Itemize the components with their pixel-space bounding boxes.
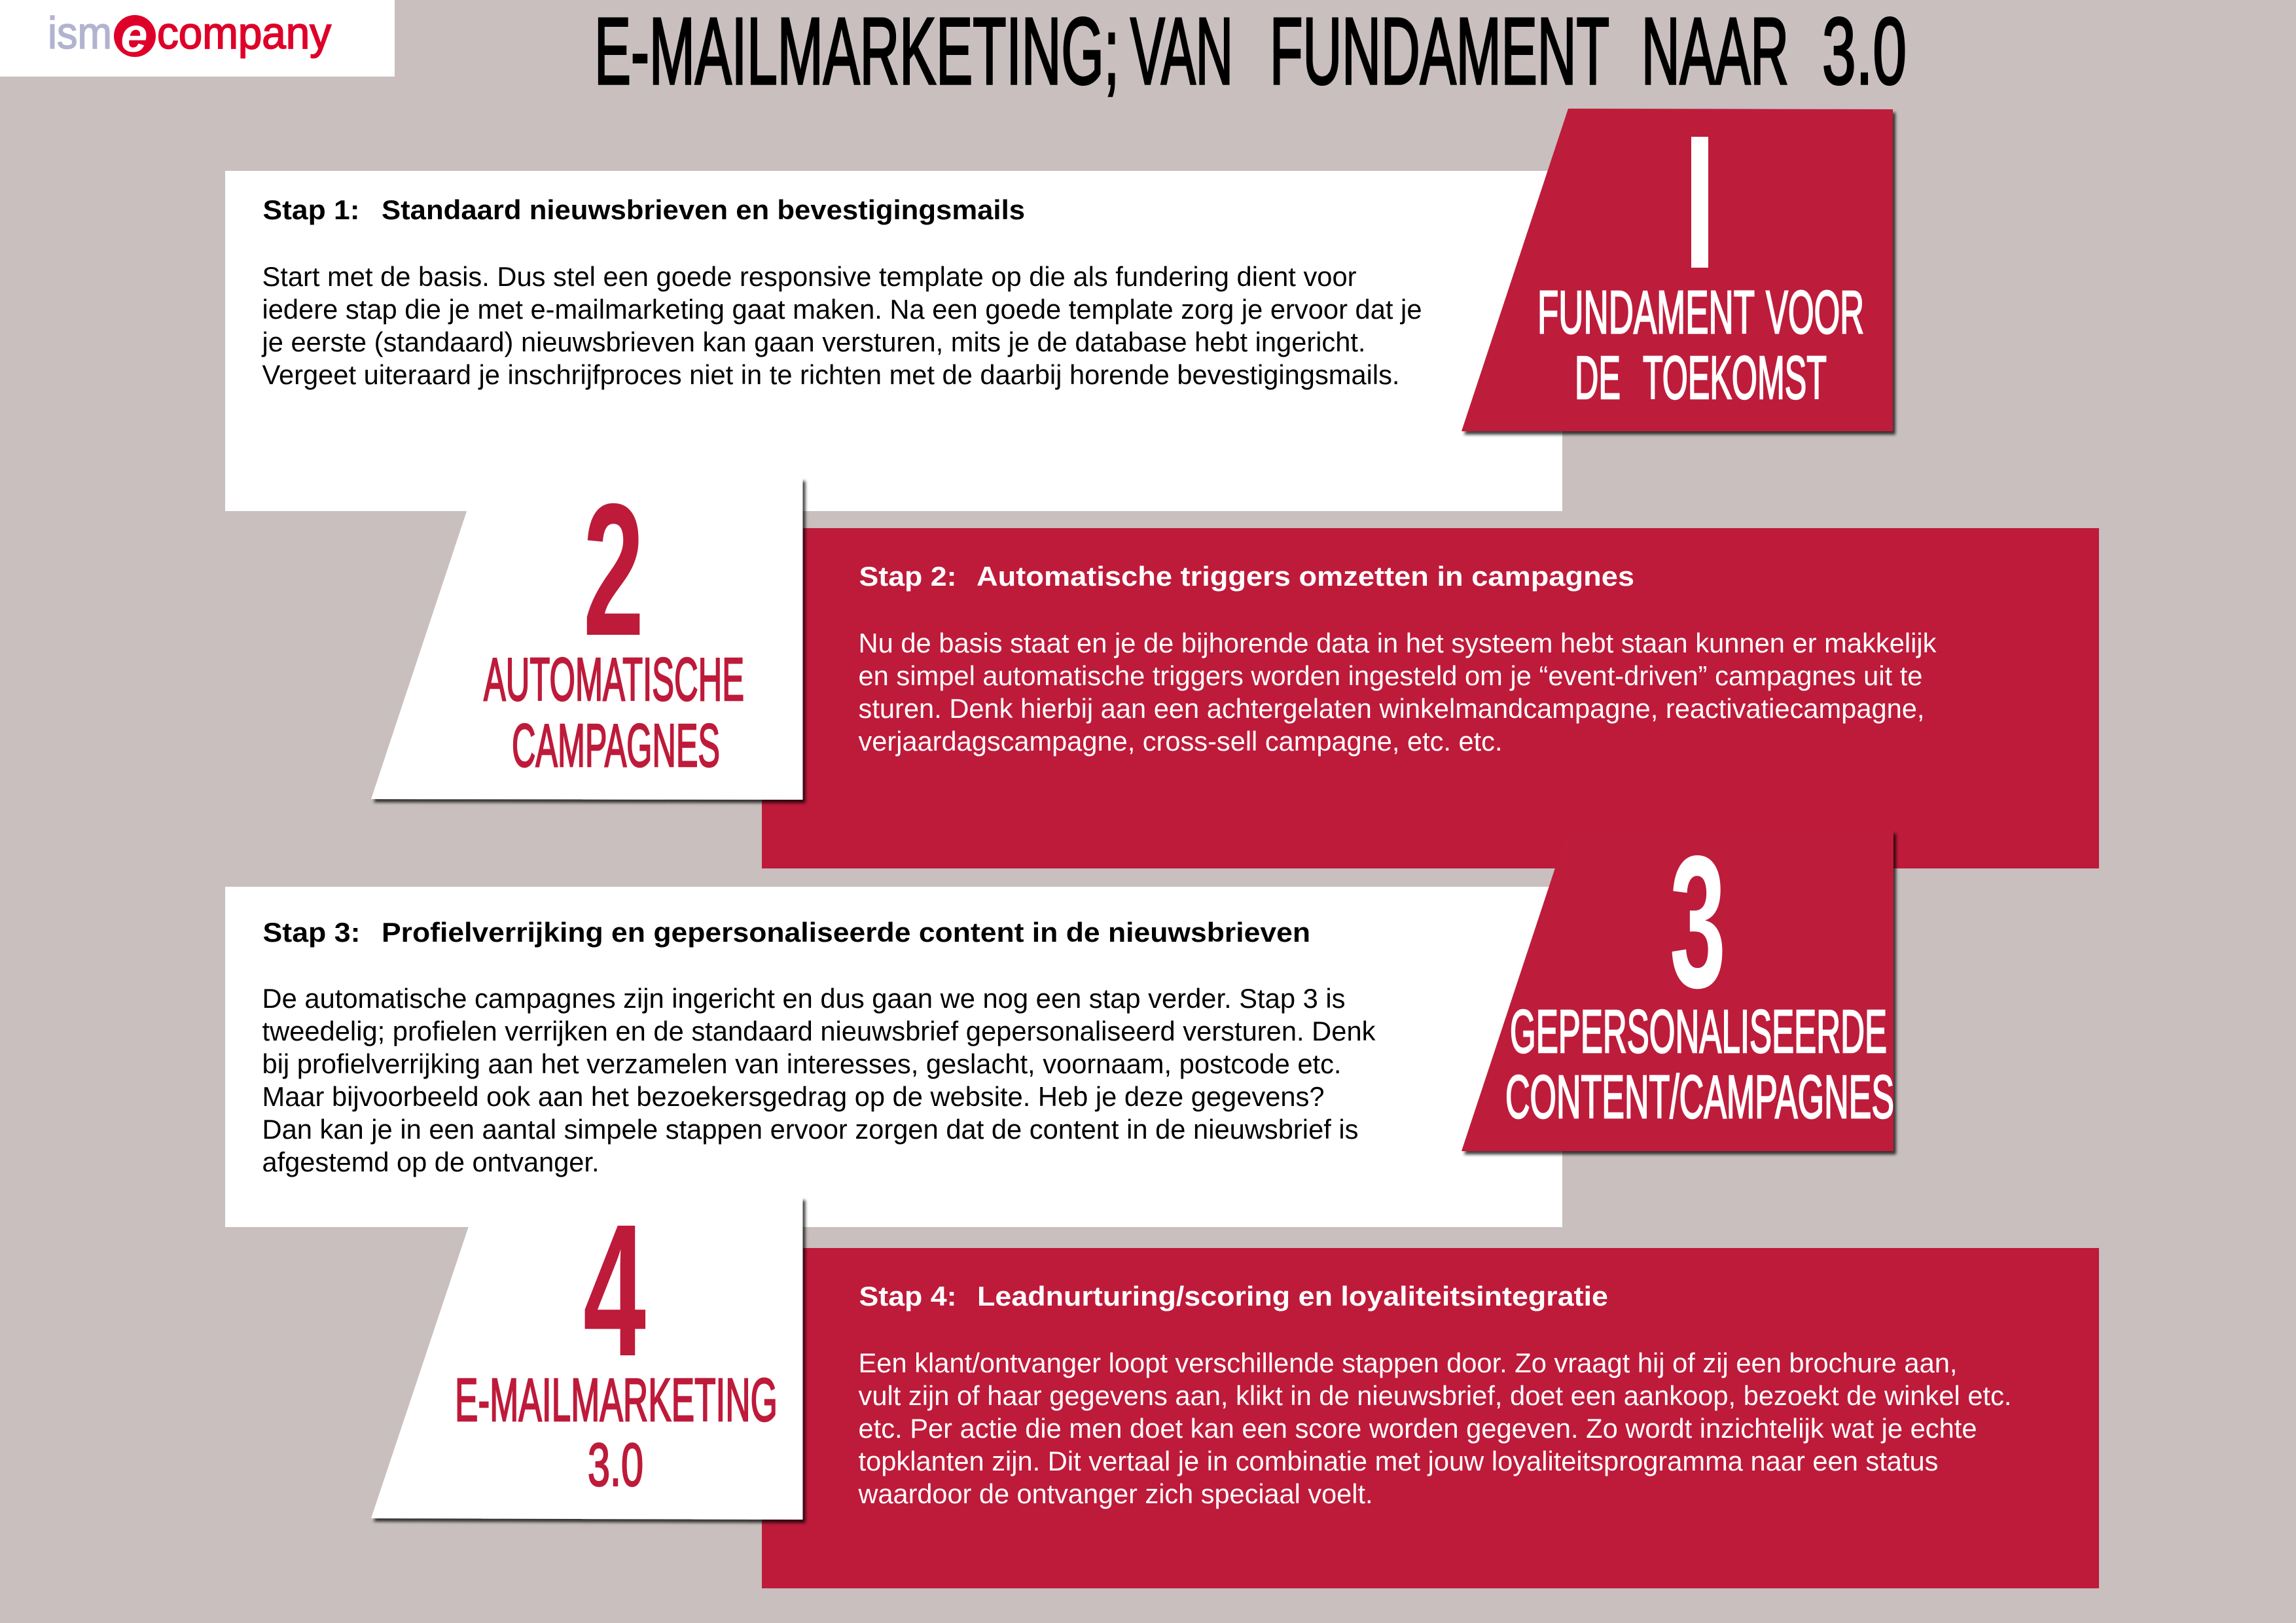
label: e-mailmarketing 3.0: E-MAILMARKETING <box>455 1366 778 1434</box>
label: gepersonaliseerde content/campagnes: GEPERSONALISEERDE <box>1510 997 1887 1065</box>
text block: stap 1 <box>261 261 1422 390</box>
heading: stap 3: Stap 3: <box>263 917 360 948</box>
title: VAN <box>1130 0 1233 104</box>
text block: stap 2: verjaardagscampagne, cross-sell campagne, etc. etc. <box>859 726 1503 757</box>
text block: stap 2: sturen. Denk hierbij aan een achtergelaten winkelmandcampagne, reactivatiecampagne, <box>859 693 1924 724</box>
tag: 1 fundament voor de toekomst <box>1462 77 1893 431</box>
logo: ism e company: e <box>120 8 148 62</box>
text block: stap 1: iedere stap die je met e-mailmarketing gaat maken. Na een goede template zorg je ervoor dat je <box>262 294 1422 325</box>
heading: stap 2: Automatische triggers omzetten in campagnes <box>977 561 1634 592</box>
text block: stap 3 <box>262 983 1376 1177</box>
heading: stap 2: Stap 2: <box>859 561 957 592</box>
text block: stap 4 <box>858 1347 2012 1509</box>
text block: stap 3: tweedelig; profielen verrijken en de standaard nieuwsbrief gepersonaliseerd versturen. Denk <box>262 1016 1376 1046</box>
tag: 2 automatische campagnes <box>371 465 802 800</box>
text block: stap 2 <box>859 628 1937 757</box>
text block: stap 3: afgestemd op de ontvanger. <box>262 1147 600 1177</box>
text block: stap 4: Een klant/ontvanger loopt verschillende stappen door. Zo vraagt hij of zij een brochure aan, <box>859 1347 1957 1378</box>
text block: stap 4: topklanten zijn. Dit vertaal je in combinatie met jouw loyaliteitsprogramma naar een status <box>859 1446 1939 1476</box>
heading: stap 1: Standaard nieuwsbrieven en bevestigingsmails <box>382 194 1025 225</box>
heading: stap 3: Profielverrijking en gepersonaliseerde content in de nieuwsbrieven <box>382 917 1310 948</box>
label: e-mailmarketing 3.0: 3.0 <box>588 1431 643 1499</box>
label: fundament voor de toekomst: DE <box>1575 344 1621 412</box>
panel: stap 3 <box>225 887 1562 1227</box>
tag: 3 gepersonaliseerde content/campagnes <box>1462 817 1894 1151</box>
tag: 4 e-mailmarketing 3.0 <box>371 1185 802 1520</box>
title: 3.0 <box>1822 0 1907 104</box>
label: fundament voor de toekomst <box>1537 278 1864 412</box>
label: automatische campagnes: AUTOMATISCHE <box>484 645 744 713</box>
text block: stap 4: etc. Per actie die men doet kan een score worden gegeven. Zo wordt inzichtelijk wat je echte <box>859 1413 1977 1444</box>
label: fundament voor de toekomst: VOOR <box>1766 278 1864 346</box>
label: e-mailmarketing 3.0 <box>455 1366 778 1499</box>
label: gepersonaliseerde content/campagnes: CONTENT/CAMPAGNES <box>1505 1063 1894 1131</box>
text block: stap 2: en simpel automatische triggers worden ingesteld om je “event-driven” campagnes uit te <box>859 660 1923 691</box>
logo: ism e company <box>0 0 395 77</box>
label: fundament voor de toekomst: TOEKOMST <box>1643 344 1827 412</box>
heading: stap 1: Stap 1: <box>263 194 360 225</box>
title <box>594 0 1907 104</box>
title: NAAR <box>1641 0 1789 104</box>
title: FUNDAMENT <box>1270 0 1609 104</box>
logo: ism e company: company <box>157 8 331 58</box>
label: fundament voor de toekomst: FUNDAMENT <box>1537 278 1755 346</box>
text block: stap 1: Vergeet uiteraard je inschrijfproces niet in te richten met de daarbij horende bevestigingsmails. <box>262 359 1399 390</box>
text block: stap 1: Start met de basis. Dus stel een goede responsive template op die als fundering dient voor <box>262 261 1357 292</box>
panel: stap 1 <box>225 171 1562 511</box>
text block: stap 3: Dan kan je in een aantal simpele stappen ervoor zorgen dat de content in de nieuwsbrief is <box>262 1114 1359 1145</box>
number 2: 2 <box>583 465 644 675</box>
text block: stap 2: Nu de basis staat en je de bijhorende data in het systeem hebt staan kunnen er makkelijk <box>859 628 1937 658</box>
label: automatische campagnes <box>484 645 744 779</box>
text block: stap 3: bij profielverrijking aan het verzamelen van interesses, geslacht, voornaam, postcode etc. <box>262 1048 1342 1079</box>
text block: stap 4: waardoor de ontvanger zich speciaal voelt. <box>858 1478 1373 1509</box>
text block: stap 4: vult zijn of haar gegevens aan, klikt in de nieuwsbrief, doet een aankoop, bezoekt de winkel etc. <box>859 1380 2012 1411</box>
number 1: 1 <box>1634 77 1758 326</box>
text block: stap 1: je eerste (standaard) nieuwsbrieven kan gaan versturen, mits je de database hebt ingericht. <box>261 327 1366 357</box>
number 3: 3 <box>1670 817 1726 1027</box>
title: E-MAILMARKETING; <box>594 0 1119 104</box>
heading: stap 4: Leadnurturing/scoring en loyaliteitsintegratie <box>977 1281 1608 1311</box>
text block: stap 3: De automatische campagnes zijn ingericht en dus gaan we nog een stap verder. Stap 3 is <box>262 983 1346 1014</box>
label: automatische campagnes: CAMPAGNES <box>512 711 720 779</box>
text block: stap 3: Maar bijvoorbeeld ook aan het bezoekersgedrag op de website. Heb je deze gegevens? <box>262 1081 1325 1112</box>
logo: ism e company: ism <box>48 8 112 58</box>
heading: stap 4: Stap 4: <box>859 1281 957 1311</box>
number 4: 4 <box>583 1185 647 1396</box>
panel: stap 2 <box>762 528 2099 868</box>
label: gepersonaliseerde content/campagnes <box>1505 997 1894 1131</box>
panel: stap 4 <box>762 1248 2099 1588</box>
